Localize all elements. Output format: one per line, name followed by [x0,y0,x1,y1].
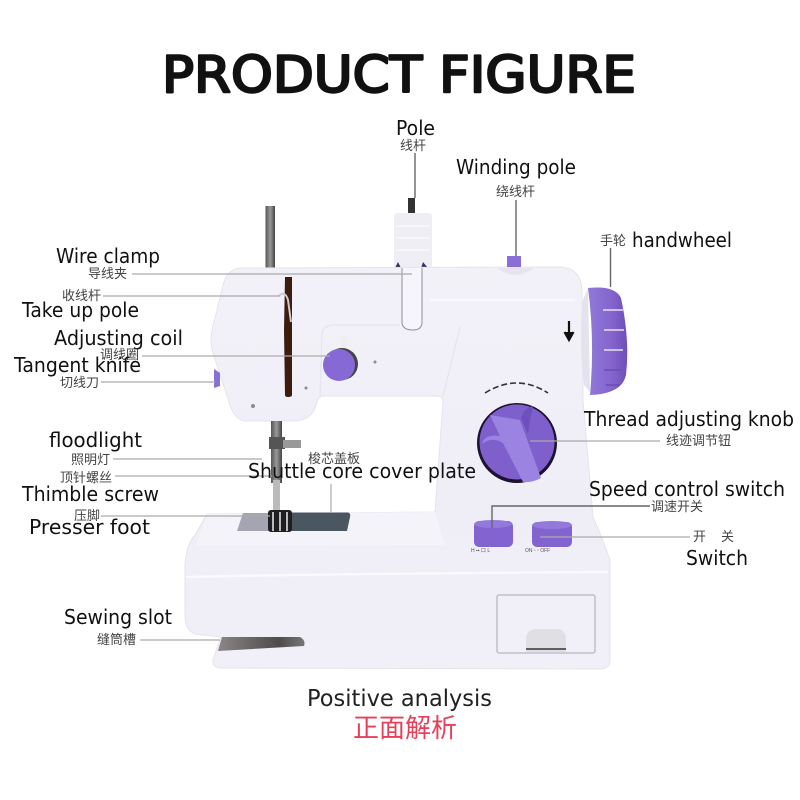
label: shuttle core cover plate: 梭芯盖板 [308,451,360,466]
label: wire clamp [56,244,412,281]
label: winding pole: 绕线杆 [496,184,535,199]
label: speed control switch: Speed control switch [589,477,785,501]
caption: positive analysis: Positive analysis [307,686,492,712]
label: adjusting coil: Adjusting coil [54,326,183,350]
shuttle cover plate [291,512,350,531]
side cutter [214,369,220,388]
label: handwheel: 手轮 [600,233,626,248]
label: presser foot: 压脚 [74,508,100,523]
label: take up pole [21,288,280,322]
handwheel [581,287,627,395]
label: presser foot: Presser foot [29,515,150,539]
label: speed control switch: 调速开关 [651,499,703,514]
sewing slot [218,637,304,651]
label: handwheel: handwheel [632,228,732,252]
label: winding pole: Winding pole [456,155,576,179]
label: switch: Switch [686,546,748,570]
caption: chinese: 正面解析 [353,713,457,743]
label: take up pole: 收线杆 [62,288,101,303]
label: shuttle core cover plate [248,451,476,513]
title: PRODUCT FIGURE [162,46,636,104]
label: adjusting coil: 调线圈 [100,347,139,362]
label: floodlight: 照明灯 [71,452,110,467]
label: presser foot [29,508,270,539]
button captions: ON ▫ ▫ OFF [525,548,550,554]
shading [196,512,445,546]
label: handwheel [600,228,732,287]
presser bar [269,421,301,510]
label: winding pole [456,155,576,256]
machine body [185,267,610,669]
label: thread adjusting knob [530,407,794,448]
label: tangent knife: Tangent knife [13,353,141,377]
label: shuttle core cover plate: Shuttle core cover plate [248,459,476,483]
drawer [497,595,595,653]
sewing machine illustration [185,198,627,669]
label: thread adjusting knob: 线迹调节钮 [666,433,731,448]
label: tangent knife: 切线刀 [60,375,99,390]
label: tangent knife [13,353,215,390]
label: thimble screw [21,470,272,506]
spool pin [408,198,415,214]
label: pole [396,116,435,198]
speed button [474,520,513,547]
label: adjusting coil [54,326,330,362]
thread guide rear pole [266,206,275,270]
thread take-up wire [279,294,291,322]
direction arrow [564,321,574,340]
label: take up pole: Take up pole [21,298,139,322]
tension knob [323,337,358,381]
label: sewing slot: 缝筒槽 [97,632,136,647]
label: sewing slot: Sewing slot [64,605,172,629]
small screws [251,360,376,408]
label: thimble screw: Thimble screw [21,482,159,506]
label: thimble screw: 顶针螺丝 [60,470,112,485]
winding pole [497,256,534,275]
thread slot [284,277,292,397]
button captions: H ▪▪ 口 L [471,548,490,554]
label: pole: Pole [396,116,435,140]
label: floodlight [49,428,262,467]
label: sewing slot [64,605,220,647]
label: speed control switch [492,477,785,528]
label: switch: 关 [721,529,734,544]
label: pole: 线杆 [400,138,426,153]
label: floodlight: floodlight [49,428,142,452]
power button [532,521,572,547]
label: switch [540,529,748,570]
presser foot [268,510,292,532]
label: switch: 开 [693,529,706,544]
stitch adjust dial [477,403,557,483]
thread guide slot [402,268,422,330]
needle plate [237,513,272,531]
label: wire clamp: Wire clamp [56,244,160,268]
label: wire clamp: 导线夹 [88,266,127,281]
button captions [471,548,550,554]
thread spool [394,213,432,268]
stitch dial scale [485,383,548,393]
